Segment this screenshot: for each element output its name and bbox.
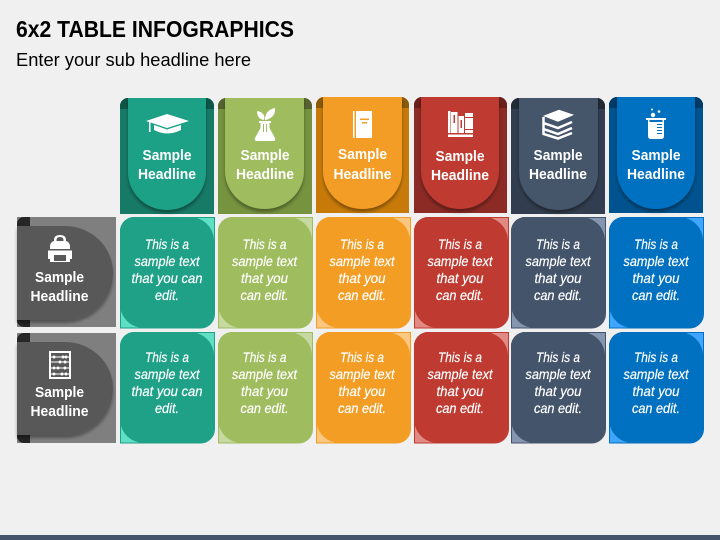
row headline 2 [30, 384, 88, 420]
cell: row 2 column 3: sample text [330, 366, 396, 382]
cell: row 1 column 2: sample text [232, 253, 298, 269]
cell: row 2 column 1: This is a [145, 349, 189, 365]
headline 4: Sample [436, 148, 484, 165]
icon: book [353, 111, 372, 138]
cell: row 1 column 3: sample text [330, 253, 396, 269]
cell: row 1 column 6: that you [632, 270, 680, 286]
cell: row 2 column 1 [120, 332, 215, 443]
icon: backpack [48, 235, 72, 262]
cell: row 2 column 1: that you can [132, 383, 203, 399]
cell: row 1 column 2: can edit. [240, 287, 288, 303]
cell: row 1 column 1: edit. [155, 287, 179, 303]
cell: row 2 column 6: that you [632, 383, 680, 399]
cell: row 2 column 3: can edit. [338, 400, 386, 416]
headline 3: Sample [338, 146, 387, 163]
row headline 1: Headline [30, 288, 88, 305]
cell: row 1 column 1 [120, 217, 215, 328]
cell: row 2 column 2: can edit. [240, 400, 288, 416]
bottom bar [0, 535, 720, 540]
cell: row 1 column 1: sample text [134, 253, 201, 269]
cell: row 2 column 5: sample text [526, 366, 592, 382]
icon: graduation cap [146, 114, 189, 134]
cell: row 2 column 3: that you [338, 383, 386, 399]
cell: row 1 column 1: This is a [145, 236, 189, 252]
headline 5: Sample [534, 147, 582, 164]
column header 4: red [414, 97, 507, 213]
cell: row 2 column 2: This is a [242, 349, 287, 365]
cell: row 2 column 5: that you [534, 383, 582, 399]
cell: row 2 column 6: sample text [624, 366, 690, 382]
cell: row 1 column 4 [414, 217, 508, 328]
column header 5: navy [511, 98, 605, 214]
column header 6: blue [609, 97, 703, 213]
cell: row 2 column 6: This is a [634, 349, 678, 365]
cell: row 2 column 4: that you [436, 383, 484, 399]
cell: row 1 column 5: that you [534, 270, 582, 286]
icon: bookshelf [448, 111, 473, 137]
cell: row 2 column 4: sample text [428, 366, 494, 382]
cell: row 1 column 6: can edit. [632, 287, 680, 303]
column header 2: green [218, 98, 312, 214]
headline 4 [431, 148, 489, 184]
cell: row 1 column 6 [609, 217, 704, 328]
headline 6 [627, 147, 685, 183]
cell: row 2 column 5: can edit. [534, 400, 582, 416]
headline 6: Sample [632, 147, 680, 164]
row headline 2: Headline [30, 403, 88, 420]
title: 6x2 TABLE INFOGRAPHICS [16, 16, 294, 42]
headline 4: Headline [431, 167, 489, 184]
headline 3 [334, 146, 392, 183]
headline 5: Headline [529, 166, 587, 183]
row headline 1: Sample [35, 269, 84, 286]
cell: row 2 column 5 [511, 332, 606, 443]
icon: abacus [50, 352, 70, 378]
headline 3: Headline [334, 166, 392, 183]
column header 3: orange [316, 97, 409, 213]
headline 1: Sample [142, 147, 192, 164]
row headline 2: Sample [35, 384, 84, 401]
cell: row 2 column 4 [414, 332, 508, 443]
icon: stack of books [544, 110, 572, 138]
cell: row 2 column 3: This is a [340, 349, 384, 365]
headline 2 [236, 147, 294, 183]
cell: row 2 column 4: This is a [438, 349, 482, 365]
cell: row 2 column 1: sample text [134, 366, 201, 382]
headline 2: Sample [240, 147, 290, 164]
cell: row 2 column 2: sample text [232, 366, 298, 382]
cell: row 2 column 5: This is a [536, 349, 580, 365]
cell: row 1 column 4: that you [436, 270, 484, 286]
cell: row 2 column 2: that you [241, 383, 288, 399]
row header 1 [17, 217, 116, 327]
cell: row 1 column 4: sample text [428, 253, 494, 269]
cell: row 2 column 6: can edit. [632, 400, 680, 416]
headline 1 [138, 147, 196, 183]
cell: row 1 column 2: This is a [242, 236, 287, 252]
headline 6: Headline [627, 166, 685, 183]
cell: row 1 column 5: can edit. [534, 287, 582, 303]
cell: row 2 column 6 [609, 332, 704, 443]
cell: row 1 column 3: can edit. [338, 287, 386, 303]
cell: row 2 column 3 [316, 332, 410, 443]
cell: row 2 column 4: can edit. [436, 400, 484, 416]
row headline 1 [30, 269, 88, 305]
headline 2: Headline [236, 166, 294, 183]
cell: row 1 column 6: sample text [624, 253, 690, 269]
headline 1: Headline [138, 166, 196, 183]
cell: row 1 column 5 [511, 217, 606, 328]
icon: flask with sprout [255, 108, 275, 141]
cell: row 2 column 2 [218, 332, 312, 443]
cell: row 2 column 1: edit. [155, 400, 179, 416]
cell: row 1 column 3: that you [338, 270, 386, 286]
cell: row 1 column 5: sample text [526, 253, 592, 269]
cell: row 1 column 2 [218, 217, 312, 328]
cell: row 1 column 6: This is a [634, 236, 678, 252]
row header 2 [17, 333, 116, 443]
cell: row 1 column 3: This is a [340, 236, 384, 252]
column header 1: teal [120, 98, 214, 214]
sub headline: Enter your sub headline here [16, 50, 251, 70]
cell: row 1 column 5: This is a [536, 236, 580, 252]
cell: row 1 column 1: that you can [132, 270, 203, 286]
icon: beaker with bubbles [646, 108, 666, 139]
cell: row 1 column 4: can edit. [436, 287, 484, 303]
cell: row 1 column 4: This is a [438, 236, 482, 252]
cell: row 1 column 3 [316, 217, 410, 328]
headline 5 [529, 147, 587, 183]
cell: row 1 column 2: that you [241, 270, 288, 286]
